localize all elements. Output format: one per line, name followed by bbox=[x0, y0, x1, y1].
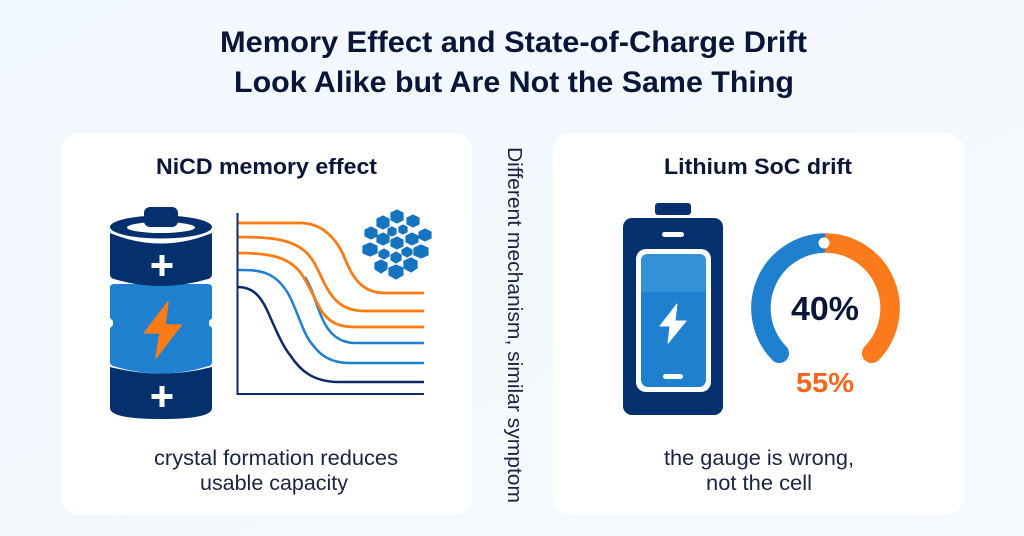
icon: white lightning bolt bbox=[660, 304, 686, 343]
icon: phone-style battery bbox=[623, 203, 723, 415]
panel: NiCD memory effect bbox=[61, 133, 472, 515]
gauge value: 55%: 55% bbox=[796, 367, 854, 398]
icon: orange lightning bolt bbox=[144, 302, 181, 358]
chart: charge gauge bbox=[761, 238, 890, 398]
icon: crystal cluster bbox=[363, 210, 431, 279]
title: Memory Effect and State-of-Charge Drift bbox=[220, 26, 807, 59]
caption: gauge is wrong: not the cell bbox=[706, 472, 812, 495]
caption: gauge is wrong bbox=[664, 447, 854, 495]
heading: NiCD memory effect: NiCD memory effect bbox=[156, 154, 378, 179]
icon: cylindrical battery bbox=[110, 207, 212, 419]
caption: crystal formation: crystal formation reduces bbox=[154, 447, 398, 470]
caption: crystal formation bbox=[154, 447, 398, 495]
caption: gauge is wrong: the gauge is wrong, bbox=[664, 447, 854, 470]
title: Look Alike but Are Not the Same Thing bbox=[234, 66, 794, 99]
gauge value: 40%: 40% bbox=[791, 290, 859, 327]
center label: vertical text: Different mechanism, similar symptom bbox=[503, 147, 525, 503]
panel: Lithium SoC drift bbox=[553, 133, 964, 515]
heading: Lithium SoC drift: Lithium SoC drift bbox=[664, 154, 853, 179]
title bbox=[220, 26, 807, 99]
caption: crystal formation: usable capacity bbox=[200, 472, 348, 495]
chart: discharge curves bbox=[238, 213, 424, 394]
